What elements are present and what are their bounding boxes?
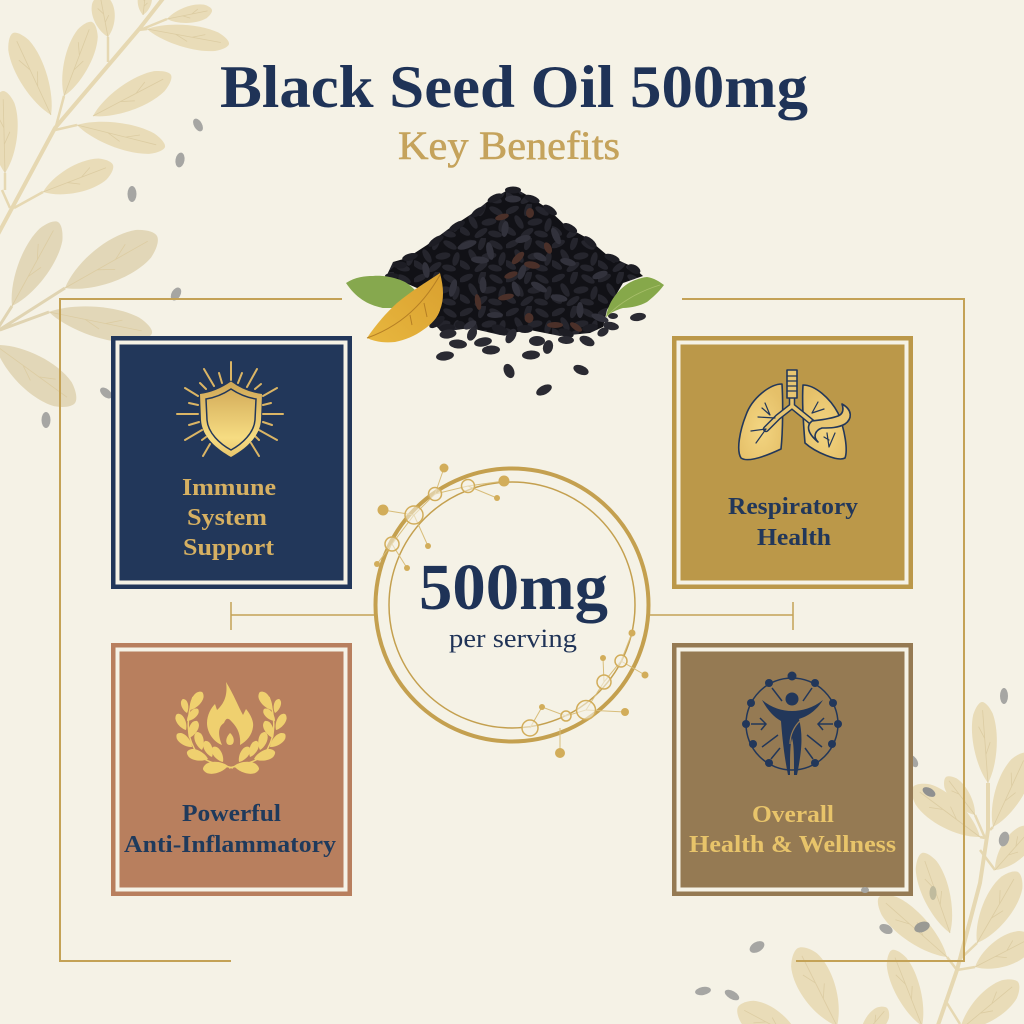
label: Powerful — [182, 801, 281, 827]
card: anti-inflammatory — [111, 643, 352, 896]
mound edge seeds — [385, 186, 642, 339]
molecule network top left — [374, 464, 510, 571]
green leaf right — [606, 277, 664, 317]
rings — [376, 468, 648, 742]
label — [689, 802, 896, 858]
icon: lungs — [739, 370, 850, 460]
card: respiratory health — [672, 336, 913, 589]
label: Overall — [752, 802, 834, 828]
label: Anti-Inflammatory — [124, 832, 336, 858]
card: immune system support — [111, 336, 352, 589]
seed mound — [387, 187, 643, 336]
label — [728, 494, 858, 551]
label — [124, 801, 336, 858]
central dosage badge — [374, 464, 648, 758]
loose seeds — [435, 312, 646, 398]
label: Health & Wellness — [689, 832, 896, 858]
black seed pile illustration — [346, 186, 664, 398]
gold frame — [60, 299, 964, 961]
small seed on card edge — [861, 887, 869, 893]
label: Respiratory — [728, 494, 858, 520]
label: Health — [757, 525, 831, 551]
individual seeds — [421, 196, 610, 332]
icon: person in node ring — [742, 672, 842, 775]
molecule network bottom right — [522, 630, 648, 758]
decorative branch: bottom right — [730, 701, 1024, 1024]
subtitle: Key Benefits — [398, 123, 620, 168]
dosage value: 500mg — [419, 551, 608, 624]
title: Black Seed Oil 500mg — [220, 54, 808, 120]
label: Immune — [182, 475, 276, 501]
card: overall health and wellness — [672, 643, 913, 896]
green leaf left — [346, 276, 415, 308]
yellow leaf — [367, 273, 443, 342]
brown seeds — [474, 208, 583, 333]
connector lines — [231, 602, 793, 630]
label: Support — [183, 535, 274, 561]
icon: shield with rays — [177, 362, 283, 457]
icon: flame in laurel wreath — [173, 682, 289, 775]
label — [182, 475, 276, 561]
decorative branch: top left — [0, 0, 231, 418]
label: System — [187, 505, 267, 531]
dosage caption: per serving — [449, 624, 577, 653]
